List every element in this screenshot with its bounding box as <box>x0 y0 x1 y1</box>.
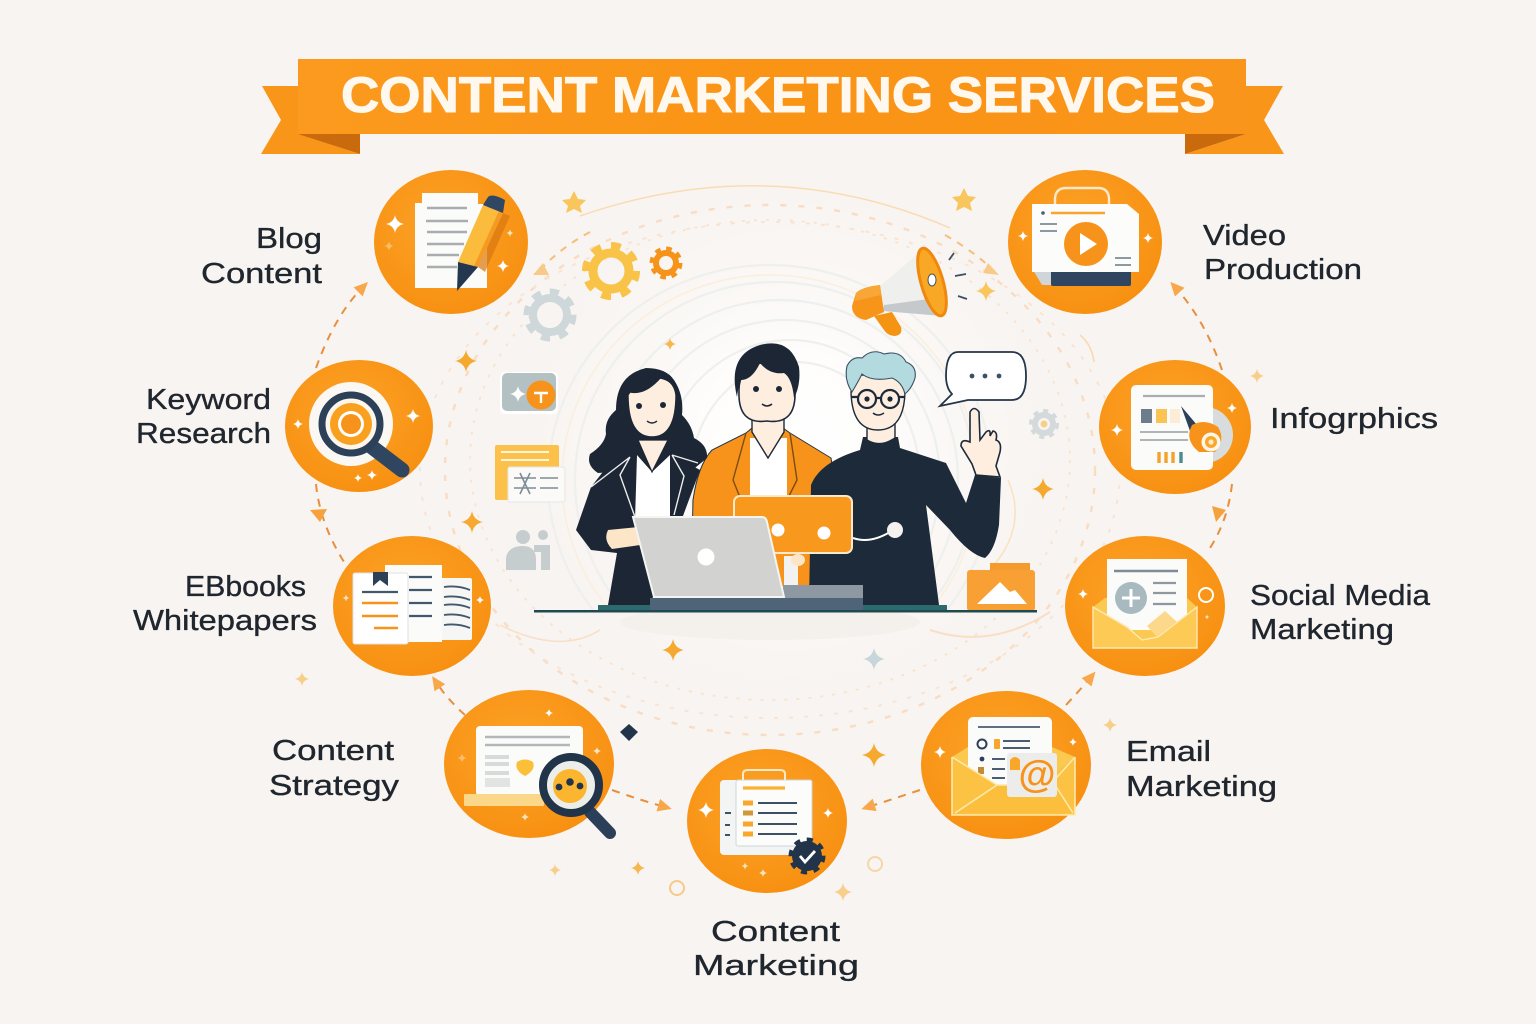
label: ebooks whitepapers: EBbooks <box>185 571 306 603</box>
icon: grey people <box>506 530 550 570</box>
icon: yellow document card <box>495 445 565 502</box>
icon: yellow gear <box>586 246 636 296</box>
label: social media marketing: Social Media <box>1250 580 1431 612</box>
icon: envelope with document <box>934 717 1077 815</box>
service: keyword research <box>136 360 433 492</box>
label: blog content <box>201 223 322 290</box>
icon: target magnifier <box>293 382 420 482</box>
arrow head: inner top right <box>983 263 999 275</box>
service: infographics <box>1099 360 1438 494</box>
icon: grey card <box>500 372 558 414</box>
label: video production: Video <box>1203 220 1286 252</box>
arrow: social to email <box>1066 677 1091 705</box>
icon: infographic sheet with disc <box>1111 385 1237 470</box>
label: content marketing: Content <box>711 916 840 948</box>
arrow: inner top right <box>945 235 995 272</box>
label: content marketing: Marketing <box>693 950 859 982</box>
label: email marketing: Marketing <box>1126 771 1277 803</box>
arrow head: right <box>1212 506 1226 522</box>
icon: orange gear <box>652 249 680 277</box>
label: content marketing <box>693 916 859 982</box>
title banner <box>261 59 1284 154</box>
desk line <box>534 610 1037 612</box>
background glow and rings <box>420 150 1120 735</box>
arrow: video to infographics <box>1175 287 1222 370</box>
arrow: infographics to social <box>1210 484 1232 548</box>
arrow head: inner top left <box>533 263 549 275</box>
label: ebooks whitepapers <box>133 571 317 637</box>
figure: man centre <box>691 343 833 586</box>
icon: video panel <box>1018 188 1153 286</box>
desk base <box>598 605 947 611</box>
arrow: ebooks to strategy <box>436 682 465 715</box>
label: content strategy: Strategy <box>269 770 400 802</box>
icon: letter in envelope <box>1078 559 1213 648</box>
service: content strategy <box>269 690 614 838</box>
icon: speech bubble <box>940 352 1026 406</box>
orange tablet <box>734 496 903 553</box>
label: blog content: Blog <box>256 223 322 255</box>
arrow: strategy to marketing <box>612 790 665 807</box>
label: content strategy: Content <box>272 735 394 767</box>
arrow head: left <box>310 509 327 522</box>
icon: small grey gear <box>1031 411 1057 437</box>
icon: megaphone <box>852 245 967 336</box>
folder icon <box>967 563 1035 611</box>
icon: clipboard with badge <box>698 770 833 877</box>
arrow: inner top left <box>538 232 590 272</box>
service: email marketing <box>921 691 1277 839</box>
label: video production <box>1203 220 1362 286</box>
figure: woman left <box>576 368 707 605</box>
label: social media marketing: Marketing <box>1250 614 1394 646</box>
icon: grey gear <box>527 292 573 338</box>
label: ebooks whitepapers: Whitepapers <box>133 605 317 637</box>
icon: documents and open book <box>342 565 484 644</box>
label: content strategy <box>269 735 400 802</box>
label: email marketing: Email <box>1126 736 1211 768</box>
at symbol: @ <box>1018 754 1056 796</box>
label: keyword research: Research <box>136 418 271 450</box>
service: video production <box>1008 170 1362 314</box>
laptop <box>633 517 863 611</box>
service: blog content <box>201 170 528 314</box>
label: email marketing <box>1126 736 1277 803</box>
icon: document and pencil <box>384 193 514 291</box>
label: video production: Production <box>1204 254 1362 286</box>
arrow: blog to keyword <box>316 287 363 368</box>
label: social media marketing <box>1250 580 1431 646</box>
arrow: keyword to ebooks <box>316 484 346 565</box>
icon: screen and magnifier <box>458 709 610 833</box>
label: keyword research <box>136 384 271 450</box>
arrow: email to marketing <box>868 790 920 807</box>
title text: CONTENT MARKETING SERVICES <box>341 67 1215 123</box>
service: content marketing <box>687 749 859 982</box>
figure: man with glasses right <box>809 352 1001 605</box>
service: social media marketing <box>1065 536 1431 676</box>
label: keyword research: Keyword <box>146 384 271 416</box>
label: blog content: Content <box>201 258 322 290</box>
decorative stars and sparkles <box>295 188 1264 901</box>
service: ebooks whitepapers <box>133 536 491 676</box>
label: infographics: Infogrphics <box>1270 403 1438 435</box>
